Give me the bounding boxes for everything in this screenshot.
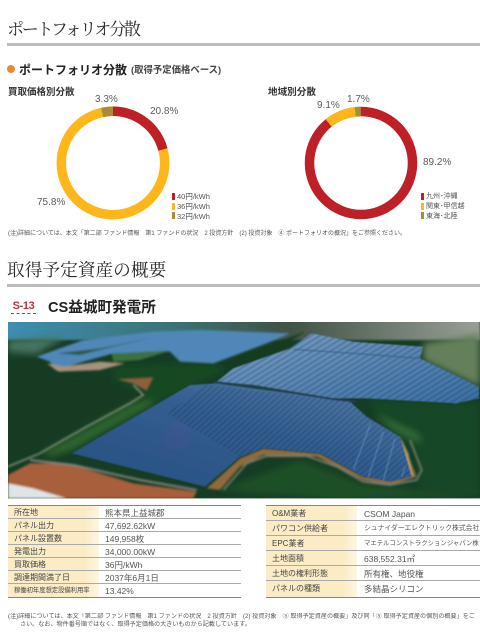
legend: region xyxy=(421,192,464,220)
row: O&M operator xyxy=(266,506,415,520)
donut chart: region xyxy=(304,106,418,220)
row: EPC contractor xyxy=(266,536,479,550)
legend: purchase price xyxy=(172,192,210,221)
data label 75.8%: 75.8% xyxy=(37,197,65,208)
data label 89.2%: 89.2% xyxy=(423,157,451,168)
row: location: 所在地 xyxy=(14,508,38,516)
chart label: by region: 地域別分散 xyxy=(268,87,316,98)
row: panel type xyxy=(266,581,424,597)
row: panel count: パネル設置数 xyxy=(14,534,62,542)
data label 1.7%: 1.7% xyxy=(347,94,370,105)
row: capacity factor xyxy=(8,584,134,597)
row: land rights xyxy=(266,566,424,580)
row: procurement end date xyxy=(8,571,159,583)
sub-heading with orange bullet: (取得予定価格ベース) xyxy=(131,64,221,75)
row: generation output: 34,000.00kW xyxy=(105,546,155,556)
donut chart: purchase price xyxy=(56,106,170,220)
row: procurement end date: 調達期間満了日 xyxy=(14,572,70,582)
table: asset details left xyxy=(8,505,241,598)
legend: region: 九州･沖縄 xyxy=(426,193,458,200)
footnote: assets: さい。なお、物件番号順ではなく、取得予定価格の大きいものから記載しています。 xyxy=(20,621,251,628)
row: land rights: 所有権、地役権 xyxy=(364,568,424,578)
row: panel count xyxy=(8,532,144,544)
legend: region: 東海･北陸 xyxy=(426,213,458,220)
legend: purchase price: 36円/kWh xyxy=(177,202,210,211)
row: panel output: パネル出力 xyxy=(14,520,54,530)
footnote: assets: (注)詳細については、本文「第二部 ファンド情報 第1 ファンドの状況 2 投資方針 (2) 投資対象 ⑤ 取得予定資産の概要」及び同「⑤ 取得予定資産の個別の概要」をご xyxy=(8,613,475,620)
row: capacity factor: 稼働初年度想定設備利用率 xyxy=(14,586,90,594)
sub-heading with orange bullet xyxy=(7,63,221,77)
row: generation output xyxy=(8,545,156,557)
sub-heading with orange bullet: ポートフォリオ分散 xyxy=(19,63,127,77)
data label 9.1%: 9.1% xyxy=(317,100,340,111)
heading: overview of assets to be acquired: 取得予定資産の概要 xyxy=(7,260,166,280)
row: panel output xyxy=(8,519,156,531)
row: power conditioner supplier xyxy=(266,521,480,535)
table: asset details right xyxy=(266,505,480,598)
row: location xyxy=(8,506,165,518)
row: land area: 土地面積 xyxy=(272,554,304,562)
row: land area xyxy=(266,551,415,565)
legend: purchase price: 32円/kWh xyxy=(177,212,210,221)
row: power conditioner supplier: シュナイダーエレクトリック株式会社 xyxy=(364,524,479,532)
row: land area: 638,552.31㎡ xyxy=(364,554,415,564)
row: purchase price: 36円/kWh xyxy=(105,560,142,570)
aerial photo of solar plant xyxy=(8,322,480,498)
row: EPC contractor: マエテルコンストラクションジャパン株 xyxy=(364,540,479,546)
asset code badge: S-13 xyxy=(13,300,34,312)
row: O&M operator: CSOM Japan xyxy=(364,508,415,518)
row: panel output: 47,692.62kW xyxy=(105,520,155,530)
row: power conditioner supplier: パワコン供給者 xyxy=(272,524,328,532)
chart label: by purchase price: 買取価格別分散 xyxy=(8,87,75,98)
row: generation output: 発電出力 xyxy=(14,546,46,556)
upper right panels xyxy=(217,333,479,403)
data label 20.8%: 20.8% xyxy=(150,106,178,117)
row: capacity factor: 13.42% xyxy=(105,586,134,596)
asset name: CS益城町発電所 xyxy=(48,300,156,316)
row: panel count: 149,958枚 xyxy=(105,534,144,544)
row: purchase price xyxy=(8,558,142,570)
row: panel type: パネルの種類 xyxy=(272,584,320,593)
row: location: 熊本県上益城郡 xyxy=(105,508,165,518)
row: purchase price: 買取価格 xyxy=(14,560,46,568)
roads xyxy=(8,385,143,467)
row: EPC contractor: EPC業者 xyxy=(272,538,304,548)
footnote: portfolio: (注)詳細については、本文「第二部 ファンド情報 第1 ファンドの状況 2 投資方針 (2) 投資対象 ④ ポートフォリオの概況」をご参照ください。 xyxy=(8,231,406,237)
row: land rights: 土地の権利形態 xyxy=(272,568,328,578)
legend: region: 関東･甲信越 xyxy=(426,203,464,210)
row: panel type: 多結晶シリコン xyxy=(364,584,424,594)
data label 3.3%: 3.3% xyxy=(95,94,118,105)
heading: portfolio diversification: ポートフォリオ分散 xyxy=(7,20,139,39)
row: O&M operator: O&M業者 xyxy=(272,508,306,518)
main panels xyxy=(72,383,412,487)
row: procurement end date: 2037年6月1日 xyxy=(105,572,159,582)
far field xyxy=(37,330,290,370)
legend: purchase price: 40円/kWh xyxy=(177,192,210,201)
footnote: assets xyxy=(8,613,475,628)
soil xyxy=(47,362,125,372)
